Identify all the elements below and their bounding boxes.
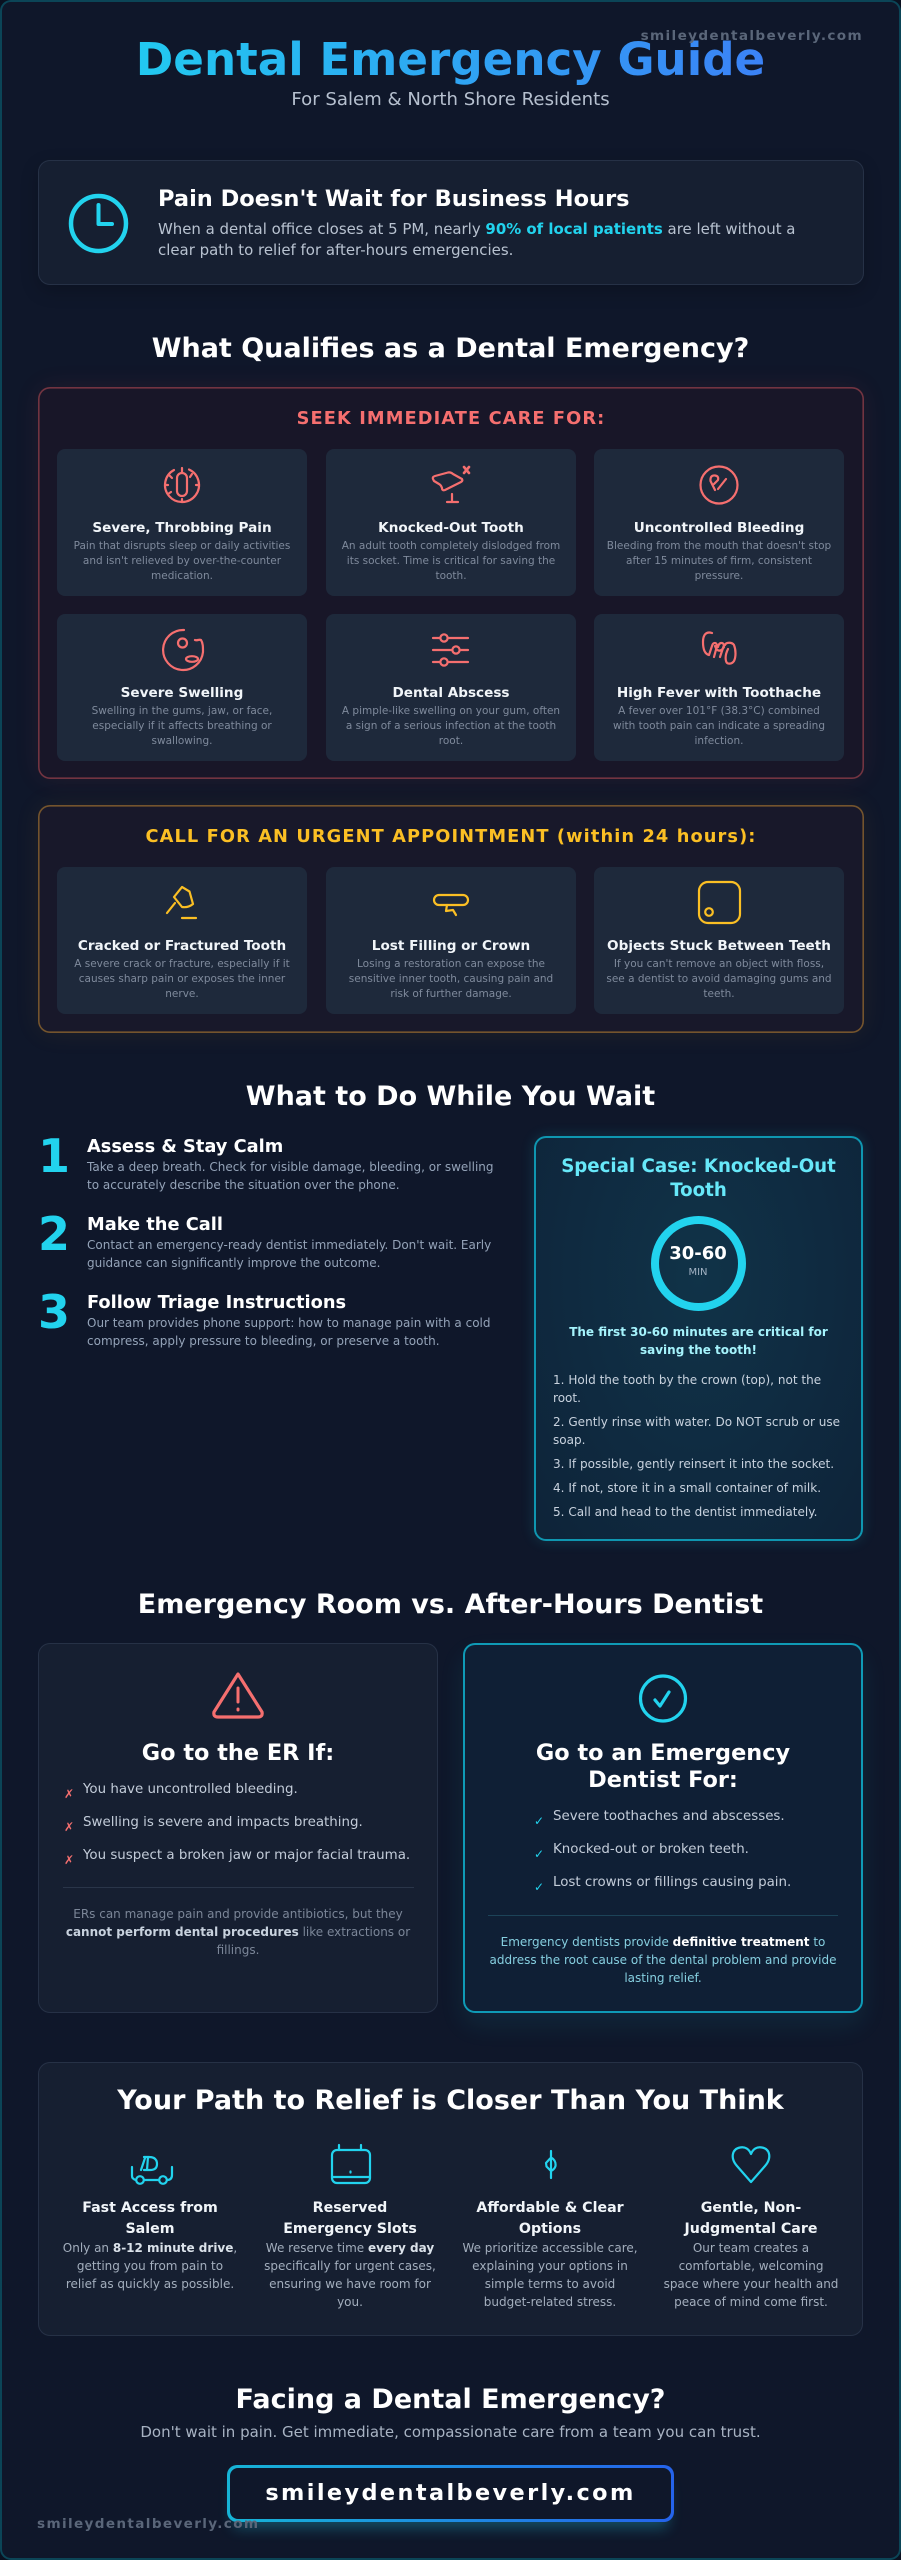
card: lost filling: Losing a restoration can expose the — [357, 958, 545, 970]
benefit: gentle care — [664, 2146, 838, 2309]
critical note — [569, 1325, 828, 1357]
panel: go to the ER: ✗ — [64, 1820, 74, 1834]
benefit: reserved slots: Reserved — [313, 2200, 387, 2216]
benefit: affordable: Affordable & Clear — [476, 2200, 624, 2216]
benefit: reserved slots: We reserve time every day — [266, 2241, 434, 2255]
card: dental abscess — [326, 614, 576, 760]
steps list: 5. Call and head to the dentist immediately. — [553, 1505, 817, 1519]
card: dental abscess: a sign of a serious infection at the tooth — [346, 720, 556, 732]
card: severe swelling — [57, 614, 307, 760]
card: high fever: A fever over 101°F (38.3°C) combined — [618, 704, 820, 716]
card: severe pain — [57, 449, 307, 596]
card: objects stuck: see a dentist to avoid damaging gums and — [606, 972, 832, 984]
dentist heading: Go to an Emergency — [536, 1740, 790, 1766]
card: cracked tooth: nerve. — [165, 988, 199, 1000]
card: severe pain: medication. — [151, 570, 213, 582]
timer ring — [651, 1216, 746, 1311]
ER item 3: You suspect a broken jaw or major facial trauma. — [83, 1848, 410, 1862]
steps list — [553, 1373, 840, 1519]
dentist item 3: Lost crowns or fillings causing pain. — [553, 1875, 791, 1890]
benefit: gentle care: comfortable, welcoming — [679, 2259, 823, 2273]
card: high fever — [594, 614, 844, 760]
heading: ER vs dentist: Emergency Room vs. After-Hours Dentist — [138, 1588, 763, 1620]
card: uncontrolled bleeding: Uncontrolled Bleeding — [634, 520, 804, 536]
critical note: The first 30-60 minutes are critical for — [569, 1325, 828, 1339]
card: cracked tooth: A severe crack or fracture, especially if it — [74, 958, 290, 970]
panel: path to relief — [38, 2062, 863, 2336]
heading: call to action: Facing a Dental Emergency? — [236, 2384, 665, 2414]
card: cracked tooth: Cracked or Fractured Tooth — [78, 938, 286, 954]
benefit: gentle care: Gentle, Non- — [701, 2200, 801, 2216]
card: severe pain: Pain that disrupts sleep or daily activities — [74, 540, 290, 552]
subtitle: For Salem & North Shore Residents — [291, 89, 610, 110]
panel: emergency dentist — [463, 1643, 863, 2013]
benefit: affordable: simple terms to avoid — [485, 2277, 615, 2291]
panel: go to the ER: ✗ — [64, 1786, 74, 1800]
benefit: affordable: budget-related stress. — [484, 2295, 616, 2309]
card: dental abscess: Dental Abscess — [392, 685, 510, 701]
special case heading: Special Case: Knocked-Out — [561, 1156, 836, 1177]
benefit: reserved slots: specifically for urgent cases, — [264, 2259, 436, 2273]
panel: go to the ER — [38, 1643, 438, 2013]
card: high fever: with tooth pain can indicate a spreading — [613, 720, 825, 732]
icon: clock — [68, 194, 128, 254]
dentist note: Emergency dentists provide definitive treatment to — [501, 1935, 825, 1949]
icon: throbbing pain — [164, 466, 200, 504]
step 2: Contact an emergency-ready dentist immediately. Don't wait. Early — [87, 1238, 491, 1252]
ER item 2: Swelling is severe and impacts breathing. — [83, 1814, 363, 1830]
benefit: affordable: We prioritize accessible care, — [462, 2241, 638, 2255]
step 3: Our team provides phone support: how to manage pain with a cold — [87, 1316, 490, 1330]
card: high fever: infection. — [695, 734, 743, 746]
step 2: guidance can significantly improve the outcome. — [87, 1256, 380, 1270]
panel: special case — [534, 1136, 863, 1541]
benefit: gentle care: space where your health and — [664, 2277, 838, 2291]
benefit: fast access: relief as quickly as possible. — [66, 2277, 234, 2291]
icon: coin — [544, 2150, 557, 2180]
card: severe pain: and isn't relieved by over-the-counter — [83, 554, 281, 566]
intro heading: Pain Doesn't Wait for Business Hours — [158, 186, 630, 212]
icon: heart — [732, 2146, 770, 2184]
card: severe swelling: Swelling in the gums, jaw, or face, — [92, 704, 272, 716]
card: severe swelling: swallowing. — [152, 734, 212, 746]
card: lost filling: risk of further damage. — [390, 988, 512, 1000]
benefit: fast access: Only an 8-12 minute drive, — [63, 2241, 237, 2255]
dentist note — [490, 1935, 836, 1985]
benefit: gentle care: peace of mind come first. — [674, 2295, 828, 2309]
step 2 — [38, 1207, 491, 1270]
title: Dental Emergency Guide — [136, 33, 765, 86]
panel: seek immediate care — [38, 387, 864, 779]
icon: car — [130, 2156, 174, 2185]
card: knocked-out tooth: its socket. Time is critical for saving the — [347, 554, 555, 566]
card: knocked-out tooth: Knocked-Out Tooth — [378, 520, 524, 536]
card: objects stuck — [594, 867, 844, 1014]
card: lost filling: Lost Filling or Crown — [372, 938, 530, 954]
icon: knocked-out tooth — [432, 466, 470, 504]
path heading: Your Path to Relief is Closer Than You Think — [117, 2085, 784, 2116]
intro text — [158, 220, 795, 259]
benefit: affordable — [462, 2150, 638, 2309]
heading: what to do: What to Do While You Wait — [246, 1080, 655, 1112]
card: uncontrolled bleeding: Bleeding from the mouth that doesn't stop — [607, 540, 831, 552]
step 3: compress, apply pressure to bleeding, or preserve a tooth. — [87, 1334, 440, 1348]
icon: calendar — [330, 2144, 372, 2184]
card: uncontrolled bleeding: after 15 minutes of firm, consistent — [626, 554, 812, 566]
dentist heading — [536, 1740, 790, 1793]
steps list: soap. — [553, 1433, 586, 1447]
step 3: Follow Triage Instructions — [87, 1292, 346, 1313]
card: severe swelling: Severe Swelling — [121, 685, 243, 701]
dentist item 1: Severe toothaches and abscesses. — [553, 1809, 785, 1824]
icon: bleeding — [699, 465, 739, 505]
card: lost filling — [326, 867, 576, 1014]
heading: what qualifies: What Qualifies as a Dental Emergency? — [152, 332, 749, 364]
steps list: root. — [553, 1391, 581, 1405]
step 3 — [38, 1285, 490, 1348]
ER note: ERs can manage pain and provide antibiotics, but they — [73, 1907, 403, 1921]
card: high fever: High Fever with Toothache — [617, 685, 821, 701]
step 3: 3 — [38, 1285, 70, 1339]
step 1: Assess & Stay Calm — [87, 1136, 283, 1157]
steps list: 1. Hold the tooth by the crown (top), not the — [553, 1373, 821, 1387]
card: knocked-out tooth: An adult tooth completely dislodged from — [342, 540, 560, 552]
benefit: gentle care: Judgmental Care — [685, 2221, 817, 2237]
ER heading: Go to the ER If: — [142, 1740, 334, 1766]
panel: emergency dentist: ✓ — [534, 1880, 544, 1894]
ER note: fillings. — [217, 1943, 259, 1957]
card: knocked-out tooth — [326, 449, 576, 596]
card: knocked-out tooth: tooth. — [435, 570, 467, 582]
card: uncontrolled bleeding — [594, 449, 844, 596]
panel: urgent appointment — [38, 805, 864, 1033]
benefit: fast access: Fast Access from — [82, 2200, 218, 2216]
card: dental abscess: root. — [439, 734, 463, 746]
icon: fever scribble — [702, 631, 737, 665]
icon: swelling — [162, 628, 204, 672]
timer ring: 30-60 — [669, 1243, 727, 1264]
card: severe pain: Severe, Throbbing Pain — [92, 520, 272, 536]
CTA button — [227, 2465, 674, 2522]
icon: object between teeth — [698, 880, 742, 924]
ER note — [66, 1907, 410, 1957]
benefit: reserved slots — [264, 2144, 436, 2309]
benefit: fast access: getting you from pain to — [77, 2259, 223, 2273]
card: cracked tooth — [57, 867, 307, 1014]
benefit: gentle care: Our team creates a — [693, 2241, 809, 2255]
CTA button: smileydentalbeverly.com — [265, 2480, 636, 2506]
step 2: 2 — [38, 1207, 70, 1261]
amber panel heading: CALL FOR AN URGENT APPOINTMENT (within 24 hours): — [145, 826, 757, 847]
site url top right: smileydentalbeverly.com — [641, 28, 863, 44]
icon: lost filling — [432, 894, 470, 916]
steps list: 3. If possible, gently reinsert it into the socket. — [553, 1457, 834, 1471]
card: severe swelling: especially if it affects breathing or — [92, 720, 272, 732]
panel: emergency dentist: ✓ — [534, 1814, 544, 1828]
special case heading — [561, 1156, 836, 1201]
CTA text: Don't wait in pain. Get immediate, compassionate care from a team you can trust. — [140, 2423, 761, 2441]
panel: intro — [38, 160, 864, 285]
icon: warning triangle — [212, 1672, 264, 1719]
card: objects stuck: Objects Stuck Between Teeth — [607, 938, 831, 954]
dentist heading: Dentist For: — [588, 1767, 738, 1793]
card: objects stuck: If you can't remove an object with floss, — [614, 958, 824, 970]
step 2: Make the Call — [87, 1214, 223, 1235]
step 1: Take a deep breath. Check for visible damage, bleeding, or swelling — [87, 1160, 494, 1174]
panel: emergency dentist: ✓ — [534, 1847, 544, 1861]
red panel heading: SEEK IMMEDIATE CARE FOR: — [297, 408, 605, 429]
intro text: clear path to relief for after-hours emergencies. — [158, 241, 513, 259]
ER note: cannot perform dental procedures like extractions or — [66, 1925, 410, 1939]
card: objects stuck: teeth. — [703, 988, 735, 1000]
icon: cracked tooth — [166, 886, 198, 920]
benefit: reserved slots: ensuring we have room for — [269, 2277, 431, 2291]
benefit: reserved slots: Emergency Slots — [283, 2221, 417, 2237]
site url bottom left: smileydentalbeverly.com — [37, 2516, 259, 2532]
benefit: fast access: Salem — [125, 2221, 175, 2237]
intro text: When a dental office closes at 5 PM, nearly 90% of local patients are left without a — [158, 220, 795, 238]
panel: go to the ER: ✗ — [64, 1852, 74, 1866]
dentist item 2: Knocked-out or broken teeth. — [553, 1842, 749, 1857]
step 1: to accurately describe the situation over the phone. — [87, 1178, 400, 1192]
dentist note: address the root cause of the dental problem and provide — [490, 1953, 836, 1967]
card: dental abscess: A pimple-like swelling on your gum, often — [342, 704, 560, 716]
step 1: 1 — [38, 1129, 70, 1183]
benefit: affordable: Options — [519, 2221, 581, 2237]
benefit: reserved slots: you. — [337, 2295, 363, 2309]
icon: check circle — [638, 1674, 688, 1723]
step 1 — [38, 1129, 494, 1192]
ER item 1: You have uncontrolled bleeding. — [83, 1782, 298, 1796]
card: lost filling: sensitive inner tooth, causing pain and — [349, 972, 553, 984]
timer ring: MIN — [688, 1267, 708, 1278]
dentist note: lasting relief. — [624, 1971, 702, 1985]
steps list: 2. Gently rinse with water. Do NOT scrub or use — [553, 1415, 840, 1429]
card: uncontrolled bleeding: pressure. — [695, 570, 743, 582]
special case heading: Tooth — [670, 1180, 727, 1201]
critical note: saving the tooth! — [640, 1343, 757, 1357]
benefit: affordable: explaining your options in — [472, 2259, 628, 2273]
icon: abscess sliders — [432, 633, 470, 667]
benefit: fast access — [63, 2156, 237, 2291]
card: cracked tooth: causes sharp pain or exposes the inner — [79, 972, 285, 984]
steps list: 4. If not, store it in a small container of milk. — [553, 1481, 821, 1495]
